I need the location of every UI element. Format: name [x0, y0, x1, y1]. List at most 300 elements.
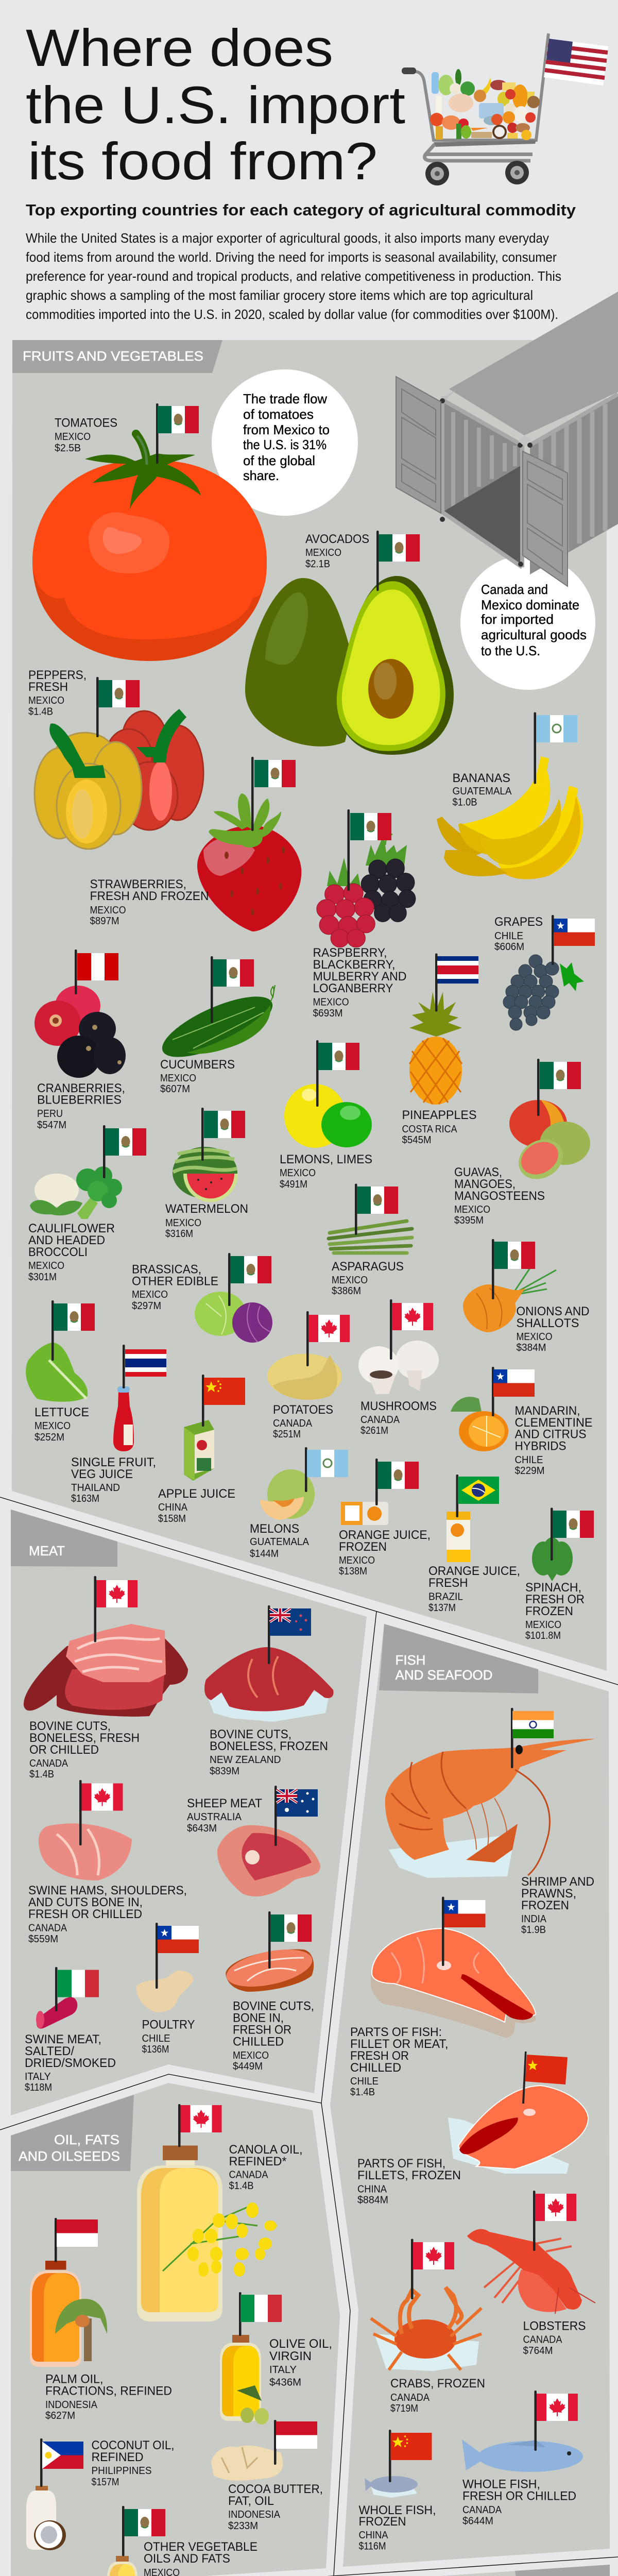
- item: guavas, mangoes, mangosteens: [454, 1059, 590, 1226]
- flag: Mexico: [375, 1459, 419, 1505]
- label: MEXICO: [454, 1204, 490, 1215]
- label: [160, 1058, 235, 1095]
- label: [210, 1727, 328, 1777]
- label: FRESH OR CHILLED: [28, 1907, 142, 1921]
- flag: Peru: [75, 950, 118, 994]
- flag: Mexico: [122, 2506, 165, 2556]
- item: apple juice: [158, 1375, 245, 1524]
- label: GRAPES: [494, 915, 543, 929]
- item: lobsters: [467, 2191, 595, 2357]
- label: $764M: [523, 2345, 553, 2357]
- item: whole fish, fresh or chilled: [462, 2391, 583, 2527]
- label: [269, 2337, 332, 2388]
- label: PERU: [37, 1108, 63, 1120]
- flag: New Zealand: [268, 1605, 311, 1664]
- label: $144M: [250, 1548, 279, 1560]
- item: cocoa butter: [211, 2420, 323, 2532]
- callout: Canada and Mexico dominate: for imported: [481, 612, 554, 627]
- label: $386M: [332, 1285, 361, 1297]
- label: BROCCOLI: [28, 1245, 88, 1259]
- icon: shrimp: [385, 1739, 595, 1878]
- label: MEXICO: [233, 2050, 269, 2061]
- label: MEXICO: [165, 1217, 201, 1229]
- label: [454, 1165, 545, 1226]
- item: bovine cuts, bone in: [223, 1911, 316, 2072]
- label: $136M: [142, 2044, 169, 2055]
- icon: spinach: [532, 1537, 573, 1581]
- callout: Canada and Mexico dominate: to the U.S.: [481, 643, 540, 658]
- label: FAT, OIL: [228, 2494, 274, 2508]
- icon: crab on ice: [371, 2287, 482, 2371]
- item: grapes: [494, 915, 595, 1030]
- label: CHINA: [158, 1502, 188, 1513]
- icon: onion: [463, 1267, 556, 1332]
- label: CANADA: [523, 2334, 562, 2345]
- icon: frozen beef cut: [204, 1647, 334, 1722]
- icon: coconut oil bottle: [26, 2486, 66, 2550]
- icon: tomato: [32, 434, 267, 661]
- item: peppers: [28, 668, 203, 849]
- item: lettuce: [26, 1300, 95, 1443]
- flag: Costa Rica: [435, 953, 478, 1012]
- label: [92, 2438, 174, 2488]
- label: LOBSTERS: [523, 2319, 586, 2333]
- label: $233M: [228, 2520, 258, 2532]
- label: MEXICO: [305, 547, 341, 558]
- item: parts of fish, fillets, frozen: [357, 2052, 588, 2206]
- label: $116M: [358, 2541, 386, 2552]
- label: INDONESIA: [45, 2399, 98, 2411]
- label: BRASSICAS,: [132, 1262, 201, 1277]
- label: $643M: [187, 1823, 217, 1834]
- label: $547M: [37, 1120, 66, 1131]
- section heading: oil, fats and oilseeds: AND OILSEEDS: [19, 2148, 120, 2164]
- label: $693M: [313, 1008, 343, 1019]
- flag: Mexico: [316, 1040, 359, 1107]
- flag: Chile: [156, 1923, 199, 1989]
- label: PEPPERS,: [28, 668, 87, 682]
- label: GUATEMALA: [250, 1536, 310, 1548]
- flag: Guatemala: [305, 1447, 348, 1492]
- icon: asparagus: [329, 1221, 412, 1253]
- panel: fish and seafood background: [330, 1624, 610, 2567]
- flag: Canada: [178, 2104, 221, 2147]
- label: CHILE: [142, 2033, 170, 2044]
- label: GUAVAS,: [454, 1165, 502, 1179]
- icon: grapes: [503, 955, 584, 1030]
- label: CHILLED: [350, 2061, 401, 2075]
- label: [29, 1719, 140, 1780]
- label: [305, 532, 369, 570]
- label: AUSTRALIA: [187, 1811, 242, 1823]
- label: GUATEMALA: [452, 786, 512, 797]
- label: VEG JUICE: [71, 1467, 133, 1481]
- label: MEXICO: [313, 996, 349, 1008]
- label: $491M: [280, 1179, 307, 1190]
- icon: shopping cart with US flag: [402, 33, 608, 185]
- icon: pineapple: [409, 992, 462, 1105]
- label: AVOCADOS: [305, 532, 369, 546]
- label: FRESH: [28, 680, 68, 694]
- icon: lobster: [467, 2229, 595, 2314]
- label: $607M: [160, 1083, 190, 1095]
- icon: strawberry: [197, 793, 301, 931]
- section heading: fish and seafood: [379, 1624, 538, 1693]
- label: [523, 2319, 586, 2357]
- icon: canola oil bottle with flowers: [137, 2145, 277, 2321]
- flag: China: [522, 2052, 568, 2104]
- label: INDONESIA: [228, 2509, 281, 2520]
- label: MEXICO: [28, 695, 64, 706]
- label: [144, 2540, 258, 2576]
- label: OR CHILLED: [29, 1743, 99, 1757]
- panel: oil fats and oilseeds background: [11, 2083, 340, 2576]
- item: cucumbers: [155, 956, 280, 1095]
- flag: Mexico: [268, 1911, 312, 1969]
- flag: Mexico: [355, 1184, 398, 1235]
- label: $719M: [390, 2403, 418, 2414]
- label: CANADA: [360, 1414, 400, 1426]
- label: WHOLE FISH,: [358, 2503, 436, 2517]
- label: [228, 2482, 323, 2532]
- label: FROZEN: [339, 1540, 387, 1554]
- label: [90, 877, 209, 927]
- label: POTATOES: [273, 1403, 333, 1417]
- label: FROZEN: [358, 2515, 406, 2529]
- icon: cauliflower and broccoli: [30, 1166, 122, 1219]
- label: BONELESS, FRESH: [29, 1731, 140, 1745]
- label: SPINACH,: [525, 1581, 581, 1595]
- flag: Mexico: [492, 1239, 535, 1299]
- intro text block: food items from around the world. Driving the need for imports is seasonal availability, consumer: [26, 249, 557, 265]
- flag: Mexico: [156, 403, 199, 464]
- label: $2.1B: [305, 558, 330, 570]
- label: CANADA: [229, 2169, 268, 2180]
- label: SWINE MEAT,: [25, 2032, 101, 2046]
- icon: orange juice carton: [447, 1512, 470, 1562]
- label: [332, 1260, 404, 1297]
- label: $897M: [90, 916, 119, 927]
- item: potatoes: [267, 1311, 350, 1440]
- label: $157M: [92, 2477, 119, 2488]
- icon: cabbages: [195, 1292, 272, 1343]
- section heading: fish and seafood: FISH: [396, 1652, 425, 1668]
- section heading: cereals: [515, 2565, 610, 2576]
- label: CANOLA OIL,: [229, 2143, 303, 2157]
- label: $137M: [428, 1602, 456, 1614]
- label: CANADA: [28, 1923, 67, 1934]
- callout: tomato trade flow: share.: [243, 468, 279, 483]
- label: DRIED/SMOKED: [25, 2056, 116, 2070]
- flag: China: [389, 2430, 432, 2482]
- label: AND HEADED: [28, 1233, 105, 1247]
- callout: tomato trade flow: [212, 369, 358, 516]
- item: shrimp and prawns: [385, 1708, 595, 1936]
- label: FRESH OR: [350, 2049, 409, 2063]
- label: PHILIPPINES: [92, 2465, 151, 2477]
- label: ITALY: [25, 2071, 50, 2082]
- item: melons: [250, 1447, 348, 1560]
- icon: lamb cut: [217, 1825, 320, 1896]
- label: $1.9B: [521, 1924, 546, 1936]
- item: olive oil, virgin: [220, 2292, 332, 2425]
- flag: Chile: [552, 915, 595, 965]
- label: ITALY: [269, 2364, 297, 2376]
- icon: orange juice can: [341, 1502, 388, 1525]
- flag: Canada: [306, 1311, 350, 1366]
- label: LETTUCE: [35, 1405, 89, 1419]
- label: CANADA: [273, 1418, 313, 1429]
- label: COSTA RICA: [402, 1124, 457, 1135]
- flag: Chile: [492, 1367, 535, 1416]
- label: CHINA: [357, 2183, 387, 2195]
- icon: olive oil bottle: [220, 2335, 269, 2425]
- label: [28, 1884, 187, 1945]
- label: ORANGE JUICE,: [428, 1564, 520, 1578]
- flag: Mexico: [537, 1059, 581, 1116]
- label: $545M: [402, 1134, 432, 1146]
- flag: Mexico: [228, 1253, 271, 1306]
- label: [428, 1564, 520, 1614]
- item: parts of fish, fillet or meat: [350, 1897, 536, 2098]
- label: MELONS: [250, 1522, 299, 1536]
- item: poultry: [136, 1923, 199, 2055]
- intro text block: While the United States is a major exporter of agricultural goods, it also imports many everyday: [26, 230, 549, 246]
- label: $101.8M: [525, 1630, 561, 1641]
- icon: beef cut: [24, 1624, 188, 1717]
- label: [187, 1797, 262, 1834]
- label: $884M: [357, 2195, 388, 2206]
- title: Where does: [26, 19, 333, 77]
- label: OTHER VEGETABLE: [144, 2540, 258, 2554]
- label: [521, 1875, 594, 1936]
- item: strawberries: [90, 757, 301, 931]
- label: [28, 668, 87, 717]
- label: $436M: [269, 2377, 301, 2388]
- label: [233, 1999, 314, 2072]
- icon: juice bottle: [113, 1386, 134, 1451]
- item: canola oil: [137, 2104, 303, 2321]
- item: cauliflower and headed broccoli: [28, 1125, 146, 1283]
- label: $229M: [515, 1465, 545, 1477]
- label: $2.5B: [55, 443, 81, 454]
- label: FROZEN: [525, 1604, 573, 1618]
- label: $627M: [45, 2410, 75, 2421]
- label: PRAWNS,: [521, 1887, 576, 1901]
- icon: mushrooms: [358, 1341, 439, 1394]
- intro text block: [26, 230, 561, 322]
- icon: orange: [451, 1397, 508, 1451]
- label: BONELESS, FROZEN: [210, 1739, 328, 1753]
- flag: Mexico: [211, 956, 254, 1023]
- label: COCONUT OIL,: [92, 2438, 174, 2452]
- label: LOGANBERRY: [313, 981, 393, 995]
- flag: Thailand: [123, 1345, 166, 1388]
- label: BANANAS: [452, 771, 510, 785]
- label: REFINED*: [229, 2155, 286, 2168]
- item: spinach: [525, 1507, 594, 1641]
- label: COCOA BUTTER,: [228, 2482, 323, 2496]
- label: [516, 1304, 589, 1353]
- item: pineapples: [402, 953, 478, 1146]
- icon: chicken: [136, 1970, 193, 2012]
- label: MEXICO: [35, 1420, 71, 1432]
- label: PALM OIL,: [45, 2372, 103, 2386]
- label: [165, 1202, 248, 1240]
- icon: oil bottle: [107, 2556, 138, 2576]
- label: [390, 2377, 485, 2414]
- label: SHRIMP AND: [521, 1875, 594, 1889]
- flag: Canada: [533, 2191, 576, 2251]
- label: $163M: [71, 1493, 99, 1504]
- label: $1.0B: [452, 796, 477, 808]
- label: $251M: [273, 1429, 301, 1440]
- icon: lettuce: [26, 1343, 88, 1402]
- label: CHILE: [494, 930, 523, 942]
- flag: Mexico: [551, 1507, 594, 1561]
- label: MEXICO: [28, 1260, 64, 1272]
- intro text block: graphic shows a sampling of the most familiar grocery store items which are top agricultural: [26, 287, 533, 303]
- item: bovine cuts, boneless, fresh or chilled: [24, 1576, 188, 1780]
- icon: berries: [35, 986, 126, 1078]
- label: CRABS, FROZEN: [390, 2377, 485, 2391]
- flag: Mexico: [251, 757, 296, 831]
- label: VIRGIN: [269, 2349, 312, 2363]
- label: [525, 1581, 585, 1641]
- label: CRANBERRIES,: [37, 1081, 125, 1095]
- label: $316M: [165, 1228, 193, 1240]
- panel: meat background: [11, 1510, 367, 2115]
- item: watermelon: [165, 1108, 248, 1240]
- label: [280, 1153, 372, 1190]
- label: [452, 771, 512, 808]
- label: SALTED/: [25, 2044, 74, 2058]
- label: [313, 946, 407, 1019]
- label: APPLE JUICE: [158, 1487, 235, 1501]
- flag: Canada: [79, 1780, 123, 1845]
- item: swine hams, shoulders: [28, 1780, 187, 1945]
- label: $118M: [25, 2082, 52, 2093]
- label: OILS AND FATS: [144, 2552, 230, 2566]
- label: FRESH OR CHILLED: [462, 2489, 576, 2503]
- callout: tomato trade flow: The trade flow: [243, 391, 327, 406]
- flag: Mexico: [201, 1108, 245, 1161]
- item: other vegetable oils and fats: [107, 2506, 258, 2576]
- label: CHILLED: [233, 2035, 284, 2048]
- icon: potato: [267, 1354, 342, 1400]
- flag: Chile: [442, 1897, 485, 1966]
- panel: fruits and vegetables background: [12, 340, 607, 1671]
- icon: frozen fish: [365, 2476, 418, 2498]
- label: THAILAND: [71, 1482, 120, 1494]
- item: avocados: [245, 531, 454, 755]
- label: LEMONS, LIMES: [280, 1153, 372, 1166]
- title: its food from?: [28, 132, 377, 191]
- label: ORANGE JUICE,: [339, 1528, 431, 1542]
- flag: Canada: [535, 2391, 578, 2451]
- flag: Mexico: [376, 531, 420, 591]
- panel: cereals background: [224, 2565, 610, 2576]
- label: WHOLE FISH,: [462, 2477, 540, 2492]
- title: the U.S. import: [26, 76, 405, 134]
- label: $1.4B: [229, 2180, 253, 2192]
- item: palm oil: [30, 2218, 172, 2421]
- label: MANGOES,: [454, 1177, 516, 1191]
- label: BOVINE CUTS,: [29, 1719, 111, 1733]
- icon: shipping container: [396, 292, 618, 586]
- item: brassicas: [132, 1253, 272, 1343]
- item: asparagus: [329, 1184, 412, 1297]
- label: OLIVE OIL,: [269, 2337, 332, 2351]
- label: BOVINE CUTS,: [233, 1999, 314, 2013]
- label: $606M: [494, 941, 524, 953]
- label: $252M: [35, 1432, 64, 1443]
- label: BOVINE CUTS,: [210, 1727, 291, 1741]
- label: [339, 1528, 431, 1577]
- label: CUCUMBERS: [160, 1058, 235, 1072]
- item: cranberries, blueberries: [35, 950, 126, 1131]
- icon: avocado: [245, 576, 454, 755]
- label: MEXICO: [332, 1275, 368, 1286]
- label: AND CITRUS: [515, 1427, 586, 1442]
- label: $261M: [360, 1425, 388, 1436]
- label: BONE IN,: [233, 2011, 284, 2025]
- label: FRESH AND FROZEN: [90, 889, 209, 903]
- callout: tomato trade flow: of tomatoes: [243, 406, 314, 422]
- icon: cucumber: [155, 985, 280, 1069]
- label: $559M: [28, 1934, 58, 1945]
- flag: Canada: [411, 2239, 454, 2299]
- icon: peppers: [35, 709, 203, 849]
- label: MEXICO: [160, 1073, 196, 1084]
- section heading: oil, fats and oilseeds: [11, 2095, 134, 2171]
- item: bovine cuts, boneless, frozen: [204, 1605, 334, 1777]
- flag: Italy: [55, 1967, 99, 2011]
- icon: berries: [317, 834, 416, 947]
- label: $301M: [28, 1272, 57, 1283]
- label: HYBRIDS: [515, 1439, 566, 1453]
- label: [350, 2025, 448, 2098]
- item: crabs, frozen: [371, 2239, 485, 2414]
- label: [358, 2503, 436, 2552]
- label: [158, 1487, 235, 1524]
- label: MEXICO: [132, 1289, 168, 1300]
- label: RASPBERRY,: [313, 946, 387, 960]
- label: $158M: [158, 1513, 186, 1524]
- label: REFINED: [92, 2450, 143, 2464]
- label: ONIONS AND: [516, 1304, 589, 1318]
- label: FRESH OR: [525, 1592, 585, 1606]
- label: STRAWBERRIES,: [90, 877, 186, 891]
- label: SWINE HAMS, SHOULDERS,: [28, 1884, 187, 1897]
- flag: Philippines: [40, 2438, 83, 2487]
- title: [26, 19, 405, 191]
- label: [273, 1403, 333, 1440]
- label: FROZEN: [521, 1899, 569, 1912]
- icon: salmon steak: [371, 1928, 536, 2038]
- label: FRESH OR: [233, 2023, 291, 2037]
- label: WATERMELON: [165, 1202, 248, 1216]
- icon: watermelon: [173, 1147, 238, 1202]
- label: INDIA: [521, 1913, 547, 1925]
- label: PARTS OF FISH:: [350, 2025, 442, 2039]
- icon: swine ham: [39, 1823, 132, 1880]
- item: mushrooms: [358, 1299, 439, 1436]
- label: TOMATOES: [55, 416, 117, 430]
- intro text block: commodities imported into the U.S. in 2020, scaled by dollar value (for commodities over $100M).: [26, 307, 558, 322]
- label: CHILE: [350, 2076, 379, 2087]
- label: NEW ZEALAND: [210, 1754, 281, 1766]
